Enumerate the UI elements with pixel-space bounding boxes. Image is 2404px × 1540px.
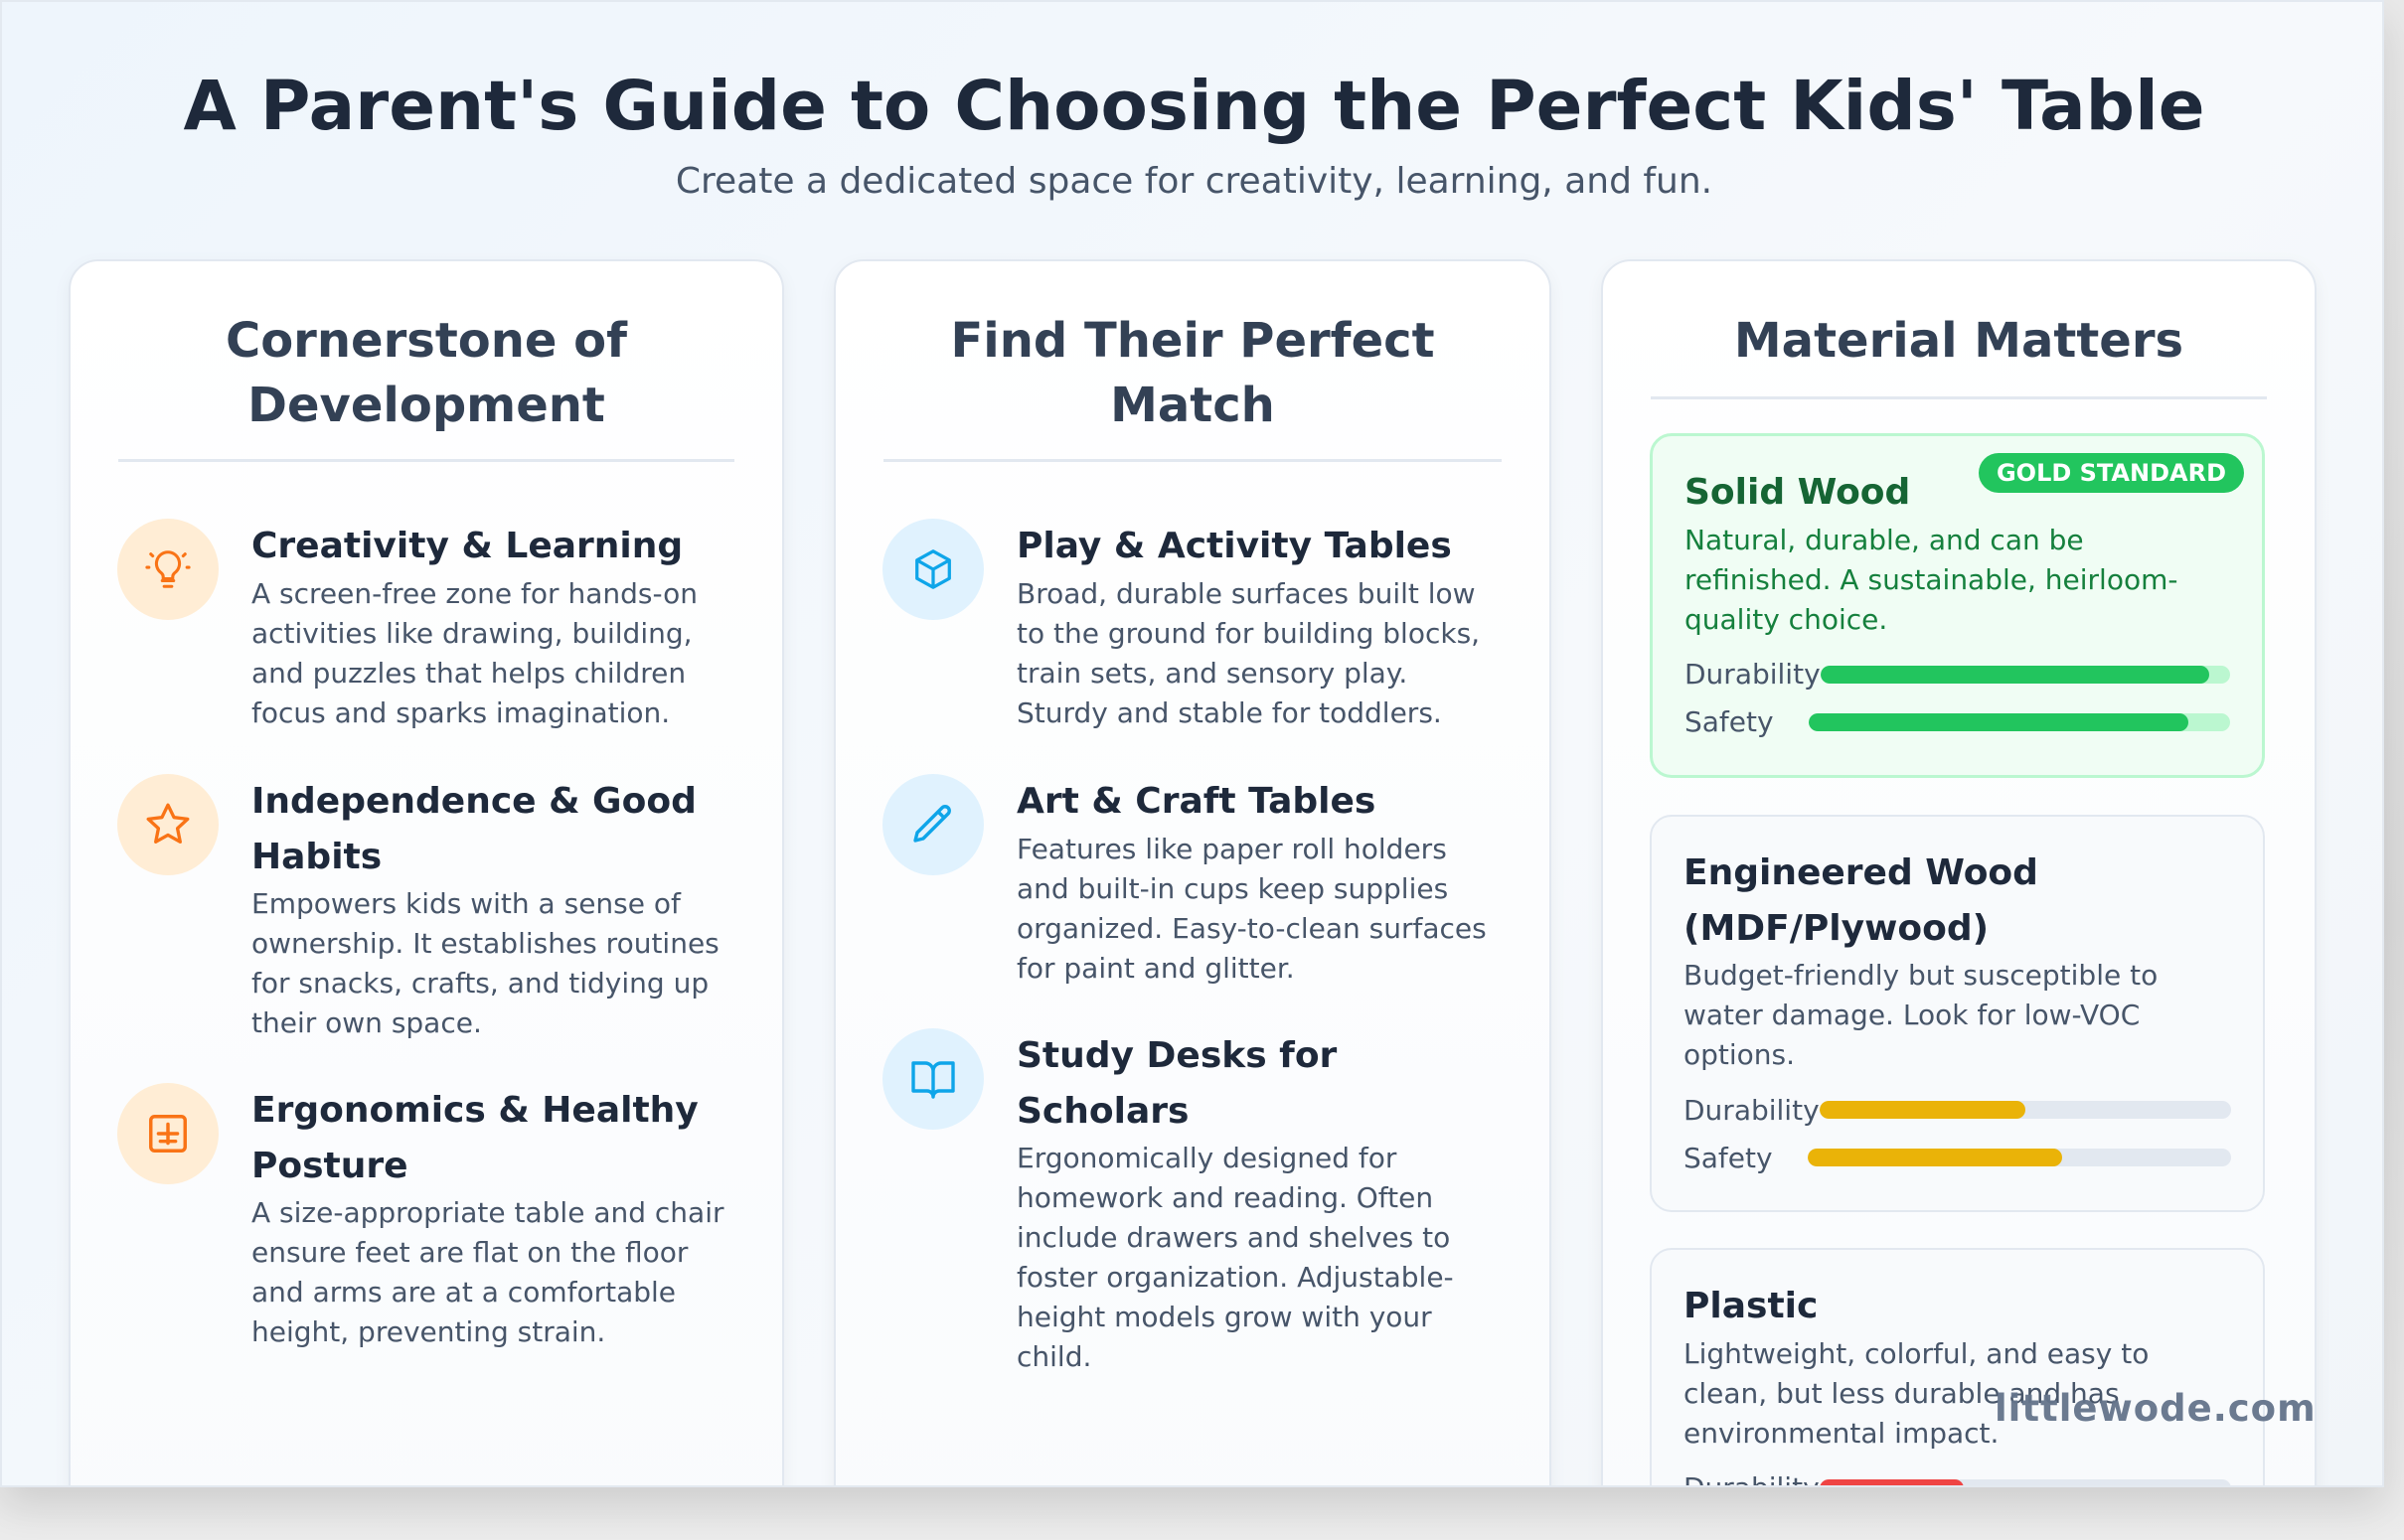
item: play tables <box>882 519 1480 729</box>
panel: cornerstone of development: A screen-free zone for hands-on activities like drawing, building, and puzzles that helps children focus and sparks imagination. <box>251 576 698 729</box>
panel: cornerstone of development: Empowers kids with a sense of ownership. It establishes routines for snacks, crafts, and tidying up their own space. <box>251 887 720 1039</box>
panel: material matters <box>1601 259 2317 1540</box>
panel: find their perfect match: Ergonomically designed for homework and reading. Often include drawers and shelves to foster organization. Adjustable-height models grow with your child. <box>1017 1142 1454 1373</box>
heading: perfect match: Find Their Perfect <box>950 313 1435 369</box>
bar: safety: Safety <box>1683 1141 1773 1174</box>
bar: safety <box>1683 1141 2231 1174</box>
title: A Parent's Guide to Choosing the Perfect Kids' Table <box>183 67 2205 146</box>
icon: pencil <box>882 774 984 875</box>
badge: gold standard <box>1979 453 2244 493</box>
heading: perfect match: Match <box>1110 378 1275 433</box>
item: independence <box>117 774 720 1039</box>
subtitle: Create a dedicated space for creativity, learning, and fun. <box>676 161 1712 202</box>
heading: perfect match <box>950 313 1435 433</box>
panel: find their perfect match: Play & Activity Tables <box>1017 526 1452 566</box>
icon: grid box <box>117 1083 219 1184</box>
material: engineered wood <box>1650 815 2265 1212</box>
material: plastic: Plastic <box>1683 1286 1818 1326</box>
bar: safety: Safety <box>1684 705 1774 738</box>
item: study desks <box>882 1028 1454 1373</box>
bar: safety <box>1683 1512 2231 1540</box>
icon: lightbulb <box>117 519 219 620</box>
watermark: littlewode.com <box>1995 1387 2317 1430</box>
heading: cornerstone <box>226 313 628 433</box>
material: engineered wood: Budget-friendly but susceptible to water damage. Look for low-VOC options. <box>1683 959 2158 1071</box>
material: plastic <box>1650 1248 2265 1540</box>
icon: cube <box>882 519 984 620</box>
icon: book <box>882 1028 984 1130</box>
panel: cornerstone of development: Independence & Good Habits <box>251 781 697 876</box>
item: creativity & learning <box>117 519 698 729</box>
material: solid wood: Solid Wood <box>1684 472 1910 513</box>
panel: cornerstone of development: A size-appropriate table and chair ensure feet are flat on the floor and arms are at a comfortable height, preventing strain. <box>251 1196 723 1348</box>
panel: cornerstone of development: Ergonomics & Healthy Posture <box>251 1090 699 1186</box>
bar: durability: Durability <box>1684 658 1821 691</box>
panel: cornerstone of development <box>69 259 784 1540</box>
panel: find their perfect match <box>834 259 1551 1540</box>
panel: find their perfect match: Features like paper roll holders and built-in cups keep supplies organized. Easy-to-clean surfaces for paint and glitter. <box>1017 833 1487 984</box>
bar: durability: Durability <box>1683 1093 1820 1127</box>
item: ergonomics <box>117 1083 723 1348</box>
badge: gold standard: GOLD STANDARD <box>1997 459 2226 487</box>
panel: cornerstone of development: Creativity & Learning <box>251 526 683 566</box>
item: art tables <box>882 774 1487 984</box>
heading: cornerstone: Cornerstone of <box>226 313 627 369</box>
material: engineered wood: Engineered Wood (MDF/Plywood) <box>1683 852 2038 948</box>
panel: find their perfect match: Art & Craft Tables <box>1017 781 1375 822</box>
material: solid wood <box>1650 433 2265 777</box>
icon: star <box>117 774 219 875</box>
panel: find their perfect match: Broad, durable surfaces built low to the ground for building blocks, train sets, and sensory play. Sturdy and stable for toddlers. <box>1017 576 1480 729</box>
heading: material matters: Material Matters <box>1734 313 2183 369</box>
bar: durability <box>1683 1471 2230 1487</box>
material: plastic: Lightweight, colorful, and easy to clean, but less durable and has environmental impact. <box>1683 1337 2149 1449</box>
bar: safety <box>1684 705 2230 738</box>
bar: durability <box>1683 1093 2231 1127</box>
heading: cornerstone: Development <box>247 378 605 433</box>
bar: durability <box>1684 658 2230 691</box>
material: solid wood: Natural, durable, and can be refinished. A sustainable, heirloom-quality choice. <box>1684 523 2177 636</box>
panel: find their perfect match: Study Desks for Scholars <box>1017 1035 1337 1131</box>
